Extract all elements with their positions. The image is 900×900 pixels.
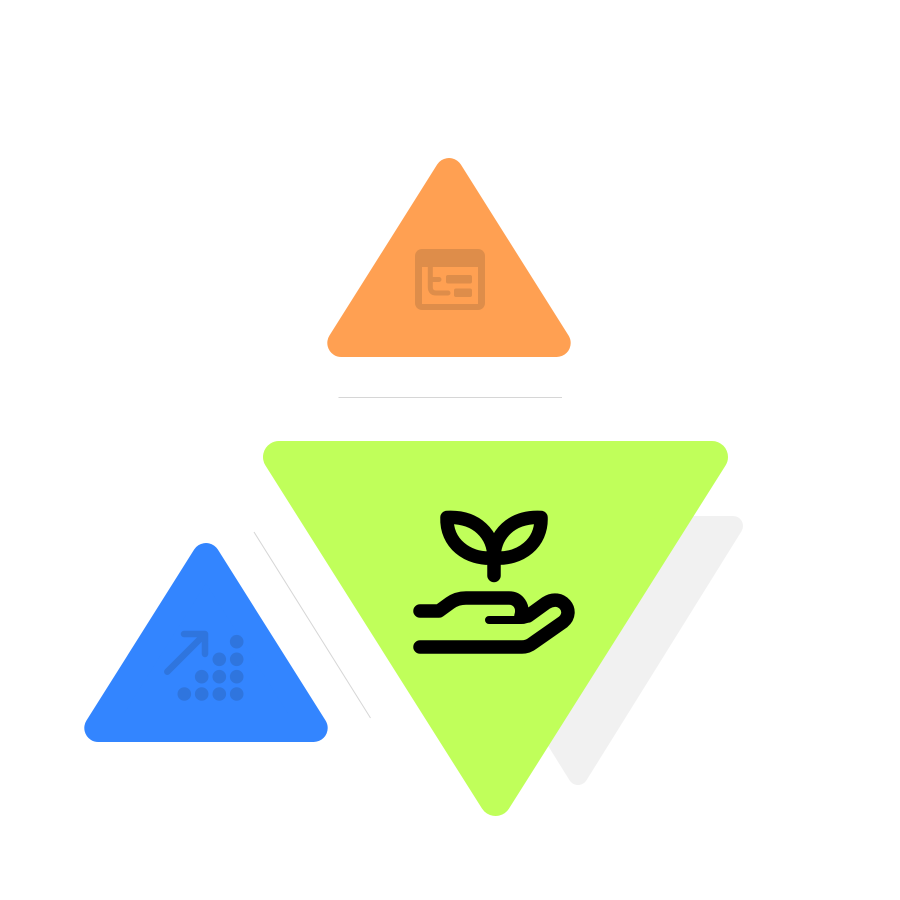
divider line under orange triangle	[338, 396, 562, 398]
hand	[420, 598, 568, 647]
divider line beside blue triangle	[254, 532, 370, 718]
orange triangle	[341, 172, 557, 343]
panel: green triangle with icon	[279, 457, 712, 800]
panel: blue triangle with icon	[98, 557, 314, 728]
panel: orange triangle with icon	[341, 172, 557, 343]
sprout leaves and stem	[447, 517, 541, 576]
green triangle	[279, 457, 712, 800]
icon: hand holding a sprout	[420, 517, 568, 647]
blue triangle	[98, 557, 314, 728]
icon: growth arrow and dots	[167, 634, 244, 701]
shadow triangle: gray	[423, 526, 733, 775]
icon: browser window with tree diagram	[415, 249, 485, 310]
